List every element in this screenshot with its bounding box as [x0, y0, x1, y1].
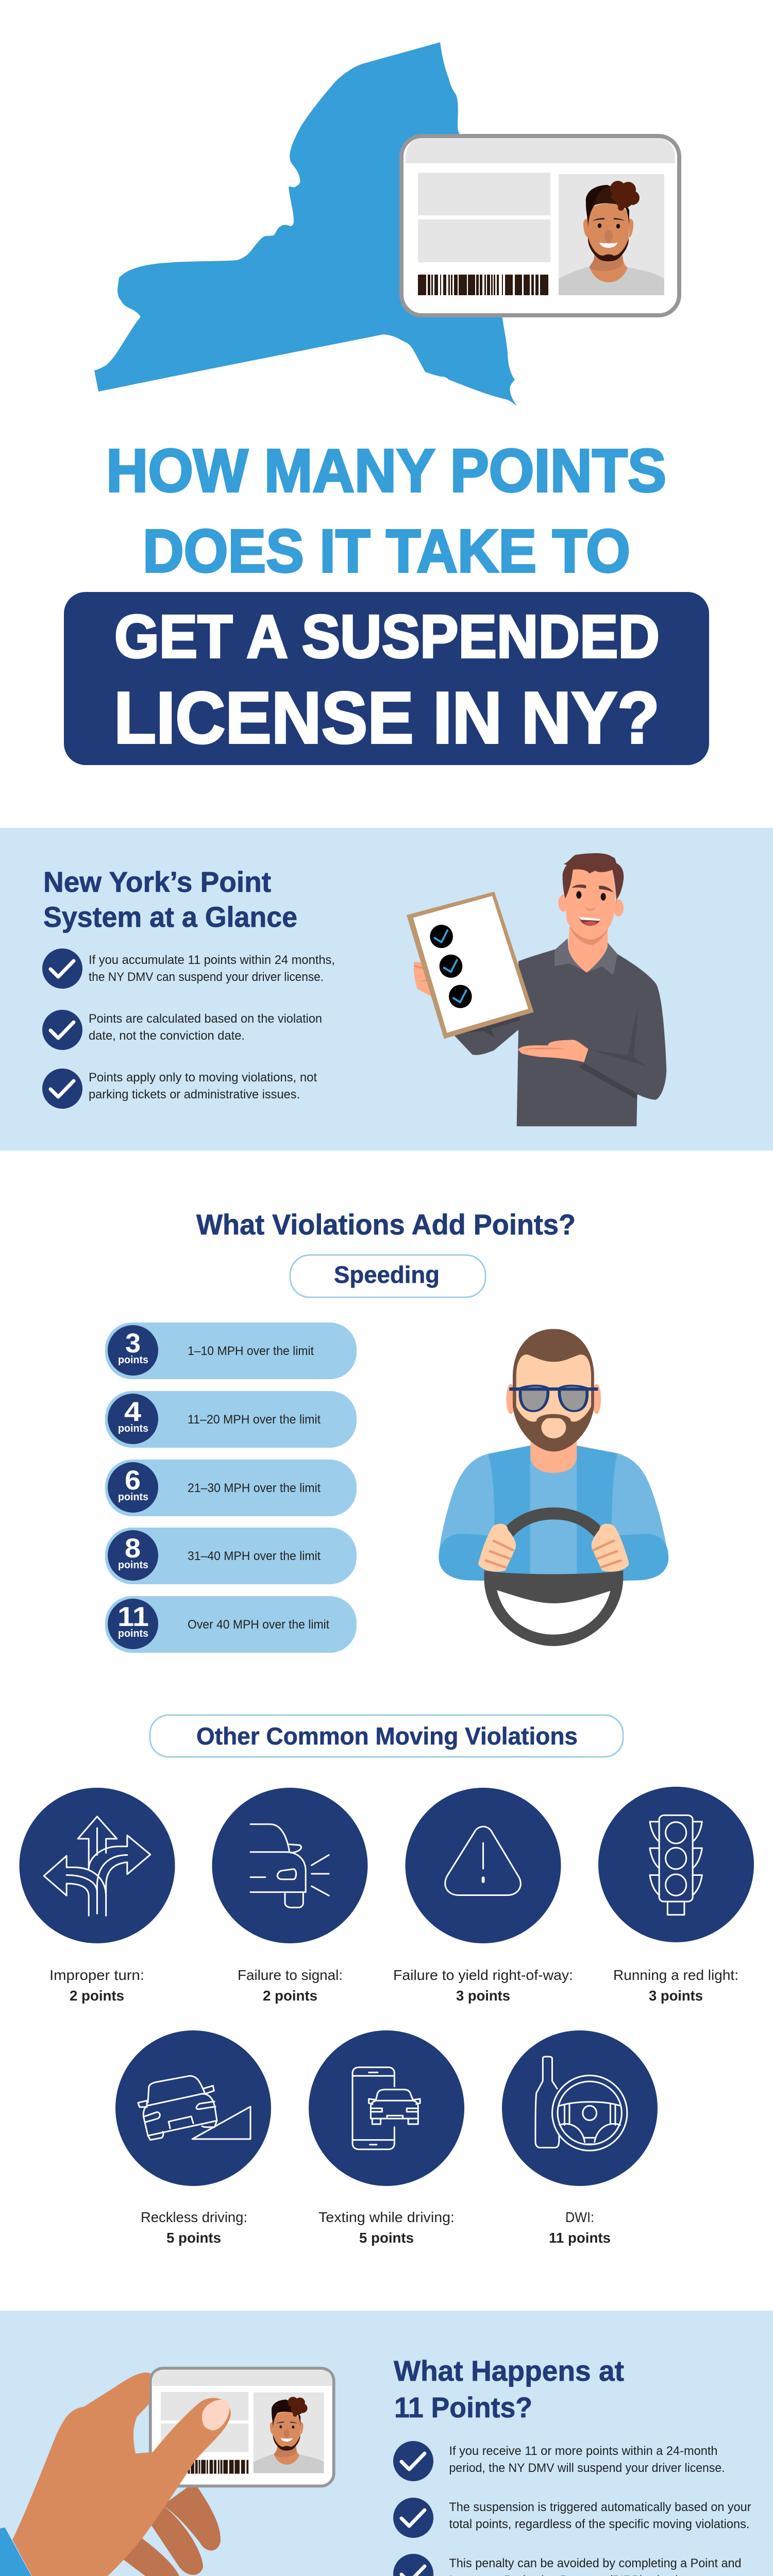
illustration: hand holding license [0, 2368, 334, 2576]
speeding row: 8 points: 8 [125, 1533, 141, 1564]
label: reckless driving: Reckless driving: [141, 2209, 247, 2225]
pill: speeding: Speeding [334, 1261, 440, 1288]
speeding row: 4 points [105, 1391, 357, 1448]
label: reckless driving [141, 2209, 247, 2246]
label: failure to signal [238, 1967, 343, 2004]
check item 3: parking tickets or administrative issues. [89, 1088, 300, 1101]
heading: what happens at 11 points [394, 2354, 624, 2424]
check item: automatic suspension: total points, regardless of the specific moving violations. [449, 2517, 749, 2531]
check item: 11 or more points [393, 2441, 725, 2481]
speeding row: 3 points: points [118, 1354, 148, 1366]
check item: 11 or more points: If you receive 11 or more points within a 24-month [449, 2444, 717, 2458]
label: running a red light: 3 points [649, 1988, 703, 2004]
label: DWI: DWI: [565, 2209, 594, 2225]
speeding row: 8 points: 31–40 MPH over the limit [188, 1549, 321, 1563]
speeding row: 11 points [105, 1596, 357, 1653]
pill: other common moving violations: Other Common Moving Violations [196, 1722, 578, 1750]
label: running a red light: Running a red light: [613, 1967, 738, 1983]
label: texting while driving: Texting while driving: [318, 2209, 455, 2225]
illustration: man presenting checklist [407, 853, 666, 1126]
pill: speeding [290, 1255, 485, 1297]
speeding row: 3 points: 1–10 MPH over the limit [188, 1344, 314, 1358]
title: LICENSE IN NY? [114, 677, 660, 759]
check item 1 [42, 948, 335, 989]
speeding row: 3 points [105, 1323, 357, 1379]
icon: texting while driving [309, 2030, 464, 2186]
speeding row: 4 points: points [118, 1423, 148, 1434]
heading: point system: New York’s Point [43, 866, 271, 898]
label: failure to signal: 2 points [263, 1988, 317, 2004]
label: failure to yield [393, 1967, 573, 2004]
icon: improper turn [20, 1788, 175, 1943]
check item 1: the NY DMV can suspend your driver license. [89, 970, 324, 984]
speeding row: 3 points: 3 [125, 1328, 141, 1359]
speeding row: 6 points: 21–30 MPH over the limit [188, 1481, 321, 1495]
panel: point system at a glance [0, 828, 773, 1150]
check item 3: Points apply only to moving violations, not [89, 1071, 317, 1084]
label: texting while driving: 5 points [359, 2230, 414, 2246]
check item: penalty avoided: This penalty can be avoided by completing a Point and [449, 2556, 741, 2570]
heading: point system: System at a Glance [43, 901, 297, 933]
icon: traffic light [598, 1787, 754, 1942]
speeding row: 6 points: 6 [125, 1465, 141, 1496]
label: improper turn [49, 1967, 144, 2004]
pill: other common moving violations [150, 1715, 623, 1757]
speeding row: 6 points: points [118, 1492, 148, 1503]
speeding row: 8 points: points [118, 1560, 148, 1571]
speeding row: 4 points: 4 [124, 1397, 142, 1427]
icon: DWI bottle and wheel [502, 2030, 658, 2186]
label: DWI: 11 points [549, 2230, 611, 2246]
speeding row: 8 points [105, 1528, 357, 1584]
hero: New York state map [94, 42, 517, 406]
check item: penalty avoided [393, 2554, 741, 2576]
check item 2: date, not the conviction date. [89, 1029, 245, 1043]
check item 1: If you accumulate 11 points within 24 months, [89, 953, 335, 967]
label: texting while driving [318, 2209, 455, 2246]
speeding row: 11 points: Over 40 MPH over the limit [188, 1618, 329, 1632]
speeding row: 11 points: 11 [117, 1602, 149, 1632]
speeding row: 4 points: 11–20 MPH over the limit [188, 1413, 321, 1427]
title: DOES IT TAKE TO [143, 517, 630, 585]
label: reckless driving: 5 points [166, 2230, 221, 2246]
illustration: driver at steering wheel [439, 1329, 668, 1646]
check item 2 [42, 1010, 322, 1050]
label: running a red light [613, 1967, 738, 2004]
icon: failure to yield [405, 1788, 561, 1943]
label: failure to yield: Failure to yield right-of-way: [393, 1967, 573, 1983]
check item: automatic suspension [393, 2498, 751, 2538]
title: GET A SUSPENDED [114, 603, 660, 671]
label: failure to signal: Failure to signal: [238, 1967, 343, 1983]
panel: what happens at 11 points [0, 2311, 773, 2576]
title [64, 437, 709, 765]
speeding row: 6 points [105, 1460, 357, 1516]
speeding row: 11 points: points [118, 1628, 148, 1639]
heading: point system [43, 866, 297, 933]
check item 2: Points are calculated based on the violation [89, 1012, 322, 1026]
check item: 11 or more points: period, the NY DMV will suspend your driver license. [449, 2461, 725, 2475]
check item: automatic suspension: The suspension is triggered automatically based on your [449, 2500, 751, 2514]
hero: driver license card [401, 136, 679, 315]
icon: failure to signal [212, 1788, 368, 1943]
label: DWI [549, 2209, 611, 2246]
label: improper turn: Improper turn: [49, 1967, 144, 1983]
label: improper turn: 2 points [70, 1988, 124, 2004]
heading: what violations add points: What Violations Add Points? [196, 1208, 576, 1241]
heading: what happens at 11 points: What Happens at [394, 2354, 624, 2387]
icon: reckless driving [115, 2030, 271, 2186]
label: failure to yield: 3 points [456, 1988, 510, 2004]
title: HOW MANY POINTS [106, 437, 666, 505]
check item 3 [42, 1069, 317, 1109]
heading: what happens at 11 points: 11 Points? [394, 2391, 532, 2424]
